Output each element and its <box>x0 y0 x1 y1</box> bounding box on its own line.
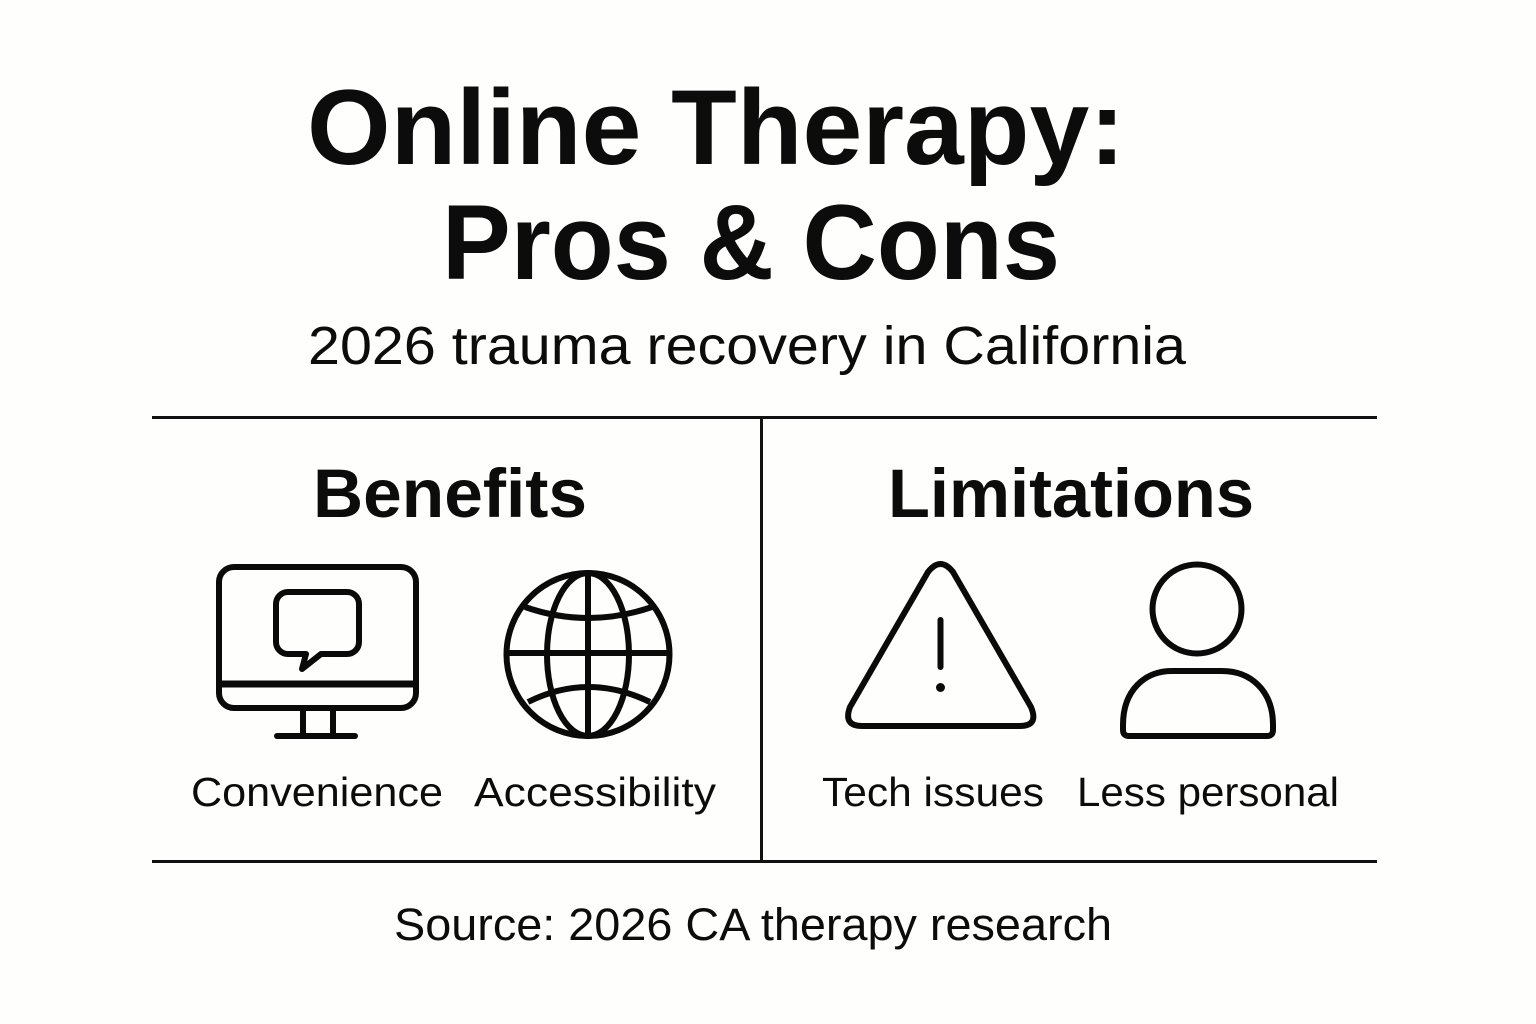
label: accessibility: Accessibility <box>474 769 717 815</box>
label: convenience: Convenience <box>191 769 443 815</box>
panel: limitations <box>822 455 1339 815</box>
label: tech issues: Tech issues <box>822 769 1044 815</box>
subtitle: 2026 trauma recovery in California <box>308 316 1187 376</box>
icon: person <box>1123 564 1273 736</box>
title <box>307 67 1125 302</box>
heading: benefits: Benefits <box>313 455 587 532</box>
icon: globe <box>506 573 670 736</box>
title: Online Therapy: <box>307 67 1125 187</box>
icon: monitor with speech bubble <box>219 567 416 736</box>
icon: warning triangle <box>848 564 1033 726</box>
title: Pros & Cons <box>442 182 1060 302</box>
panel: benefits <box>191 455 717 815</box>
source: Source: 2026 CA therapy research <box>394 899 1112 950</box>
heading: limitations: Limitations <box>888 455 1254 532</box>
label: less personal: Less personal <box>1077 769 1339 815</box>
